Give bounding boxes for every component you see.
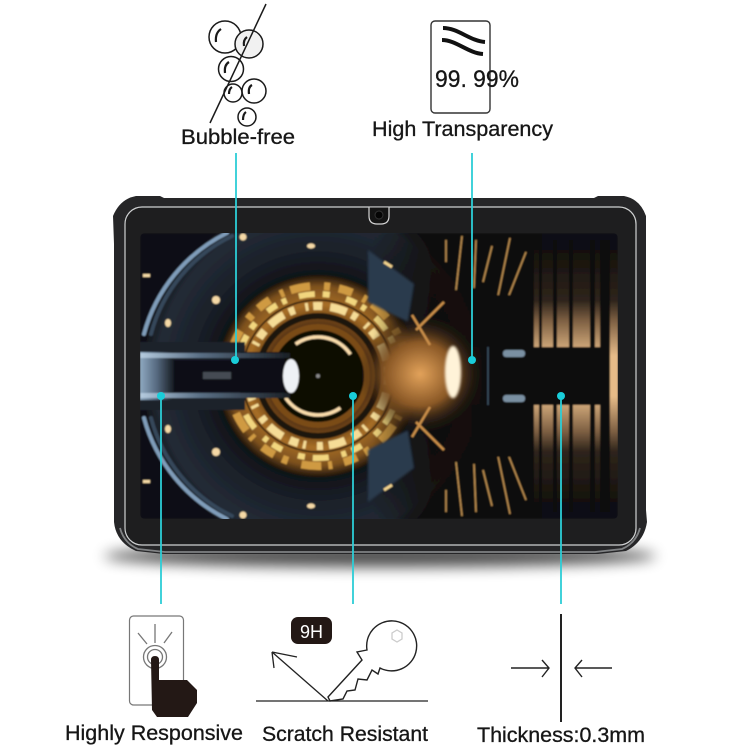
icon: highly responsive [130,616,197,717]
blue hull arcs [144,233,232,519]
9H badge: 9H [300,622,323,642]
screen artwork [140,233,618,519]
icon: high transparency: 99. 99% [435,66,519,93]
right mechanical section [372,233,542,519]
icon: high transparency [431,21,519,113]
icon: bubble-free [209,4,266,126]
left lights [143,234,315,518]
inner eye [266,324,370,428]
leader line: high transparency [468,153,476,364]
leader line: scratch resistant [349,392,357,604]
tablet shadow [104,545,656,567]
gold ring [217,275,419,477]
icon: scratch resistant key [256,617,428,701]
space station disk [146,233,482,519]
tablet body [113,196,647,554]
left arm [140,342,245,410]
label: highly responsive: Highly Responsive [65,722,243,745]
icon: thickness [511,614,612,722]
leader line: highly responsive [157,392,165,604]
label: thickness: Thickness:0.3mm [477,724,645,747]
tablet [113,196,647,554]
warm right panel [534,250,618,502]
9H badge [291,617,332,644]
label: scratch resistant: Scratch Resistant [262,723,428,746]
label: high transparency: High Transparency [372,118,554,141]
camera notch [369,208,389,224]
right arm [484,347,602,405]
leader line: bubble-free [231,153,239,364]
label: bubble-free: Bubble-free [181,126,295,149]
glass protector [125,207,636,545]
leader line: thickness [557,392,565,604]
